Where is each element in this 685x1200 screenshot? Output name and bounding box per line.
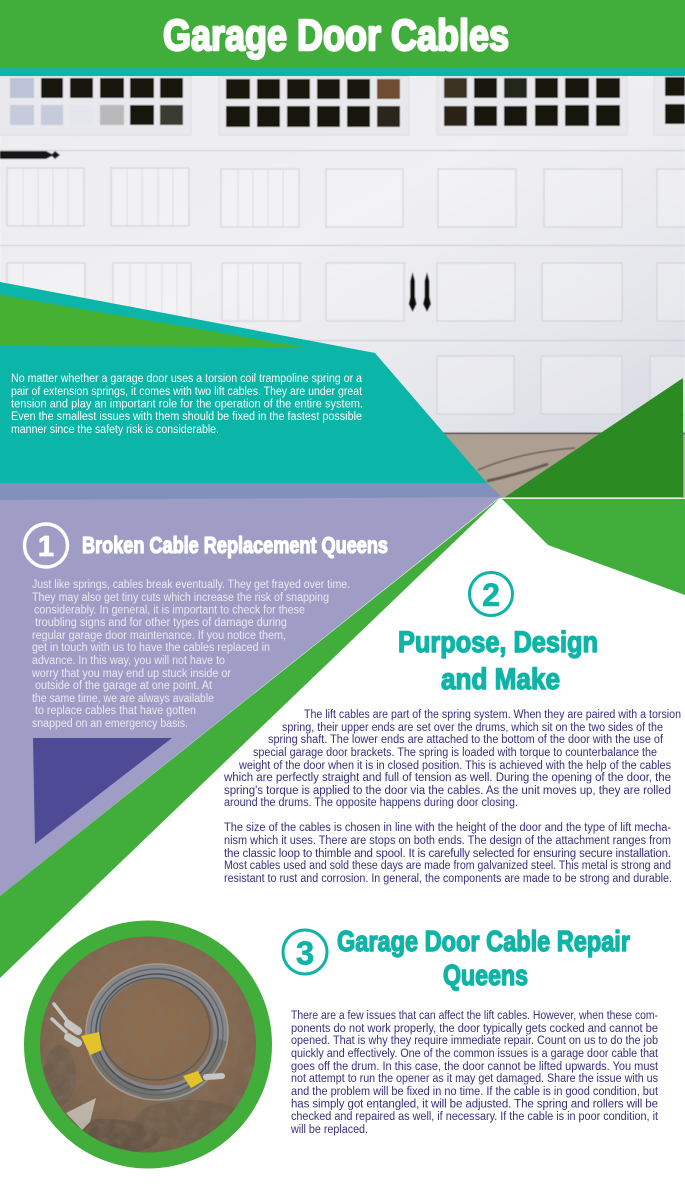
section 2 number badge: 2 xyxy=(482,577,500,613)
section 3 text: will be replaced. xyxy=(290,1124,368,1136)
dark purple triangle xyxy=(33,738,172,844)
section 2 text: the classic loop to thimble and spool. It is carefully selected for ensuring secure installation. xyxy=(224,848,671,860)
title: Garage Door Cables xyxy=(163,11,509,60)
section 3 heading xyxy=(337,926,630,992)
section 1 text xyxy=(31,579,350,730)
section 3 text: ponents do not work properly, the door typically gets cocked and cannot be xyxy=(291,1023,658,1035)
section 3 number badge xyxy=(283,930,327,974)
green corner shape xyxy=(502,499,685,595)
section 2 heading: and Make xyxy=(441,663,560,696)
garage door photo xyxy=(0,76,685,498)
section 2 text: spring's torque is applied to the door via the cables. As the unit moves up, they are rolled xyxy=(224,785,671,797)
section 2 text: weight of the door when it is in closed position. This is achieved with the help of the cables xyxy=(238,760,671,772)
section 1 text: advance. In this way, you will not have to xyxy=(32,655,225,667)
section 2 heading: Purpose, Design xyxy=(398,626,598,659)
cable ends xyxy=(52,1004,222,1077)
section 1 text: the same time, we are always available xyxy=(32,693,214,705)
section 1 text: worry that you may end up stuck inside or xyxy=(31,668,231,680)
section 3 text: not attempt to run the opener as it may get damaged. Share the issue with us xyxy=(291,1073,658,1085)
hinge strap xyxy=(0,151,60,159)
section 3 number badge: 3 xyxy=(296,934,314,972)
intro text: No matter whether a garage door uses a torsion coil trampoline spring or a xyxy=(11,373,363,385)
section 1 text: snapped on an emergency basis. xyxy=(32,718,188,730)
section 3 text xyxy=(290,1010,659,1136)
section 2 text: special garage door brackets. The spring is loaded with torque to counterbalance the xyxy=(253,747,657,759)
intro text: tension and play an important role for the operation of the entire system. xyxy=(11,398,363,410)
section 3 text: has simply got entangled, it will be adjusted. The spring and rollers will be xyxy=(291,1098,658,1110)
section 1 text: regular garage door maintenance. If you notice them, xyxy=(32,630,286,642)
section 2 text: which are perfectly straight and full of tension as well. During the opening of the door, the xyxy=(223,772,671,784)
intro text: manner since the safety risk is considerable. xyxy=(11,424,219,436)
section 1 text: outside of the garage at one point. At xyxy=(35,680,213,692)
section 3 text: checked and repaired as well, if necessary. If the cable is in poor condition, it xyxy=(291,1111,659,1123)
window frames xyxy=(0,76,685,135)
section 3 heading: Queens xyxy=(443,960,528,992)
dark green triangle xyxy=(505,378,683,497)
window panes xyxy=(10,77,685,127)
section 3 text: opened. That is why they require immediate repair. Count on us to do the job xyxy=(291,1035,658,1047)
green diagonal band xyxy=(0,497,501,978)
section 1 number badge: 1 xyxy=(38,531,54,563)
section 2 number badge xyxy=(470,572,512,616)
section 2 text: around the drums. The opposite happens during door closing. xyxy=(224,797,518,809)
section 3 text: goes off the drum. In this case, the door cannot be lifted upwards. You must xyxy=(291,1061,659,1073)
header banner xyxy=(0,0,685,68)
section 2 text xyxy=(223,709,681,885)
door section lines xyxy=(0,150,685,341)
cable photo badge xyxy=(24,920,272,1168)
section 1 text: They may also get tiny cuts which increase the risk of snapping xyxy=(32,592,329,604)
raised door panels xyxy=(7,168,685,414)
section 1 heading: Broken Cable Replacement Queens xyxy=(82,532,388,558)
ground below door xyxy=(0,432,685,498)
lavender panel xyxy=(0,483,502,896)
section 1 text: Just like springs, cables break eventually. They get frayed over time. xyxy=(32,579,350,591)
coil of steel cable xyxy=(86,964,228,1100)
section 2 text: spring, their upper ends are set over the drums, which sit on the two sides of the xyxy=(282,722,663,734)
section 1 number badge xyxy=(24,524,68,567)
section 1 text: to replace cables that have gotten xyxy=(35,705,196,717)
teal header stripe xyxy=(0,67,685,76)
section 3 text: and the problem will be fixed in no time. If the cable is in good condition, but xyxy=(291,1086,659,1098)
section 3 text: quickly and effectively. One of the common issues is a garage door cable that xyxy=(291,1048,659,1060)
green wedge xyxy=(0,295,303,347)
yellow tape xyxy=(81,1032,203,1088)
section 2 heading xyxy=(398,626,598,696)
door handles xyxy=(409,272,431,312)
intro text xyxy=(11,373,363,436)
section 2 text: nism which it uses. There are stops on both ends. The design of the attachment ranges from xyxy=(224,835,671,847)
teal intro panel xyxy=(0,282,487,483)
section 1 text: troubling signs and for other types of damage during xyxy=(35,617,287,629)
blue-grey band xyxy=(0,483,502,500)
section 1 text: get in touch with us to have the cables replaced in xyxy=(32,642,270,654)
panel grooves xyxy=(23,168,283,320)
cable photo xyxy=(40,936,256,1152)
section 1 text: considerably. In general, it is important to check for these xyxy=(34,604,305,616)
section 2 text: The size of the cables is chosen in line with the height of the door and the type of lift mecha- xyxy=(224,822,671,834)
intro text: pair of extension springs, it comes with two lift cables. They are under great xyxy=(11,386,363,398)
intro text: Even the smallest issues with them should be fixed in the fastest possible xyxy=(11,411,362,423)
section 2 text: spring shaft. The lower ends are attached to the bottom of the door with the use of xyxy=(268,734,664,746)
